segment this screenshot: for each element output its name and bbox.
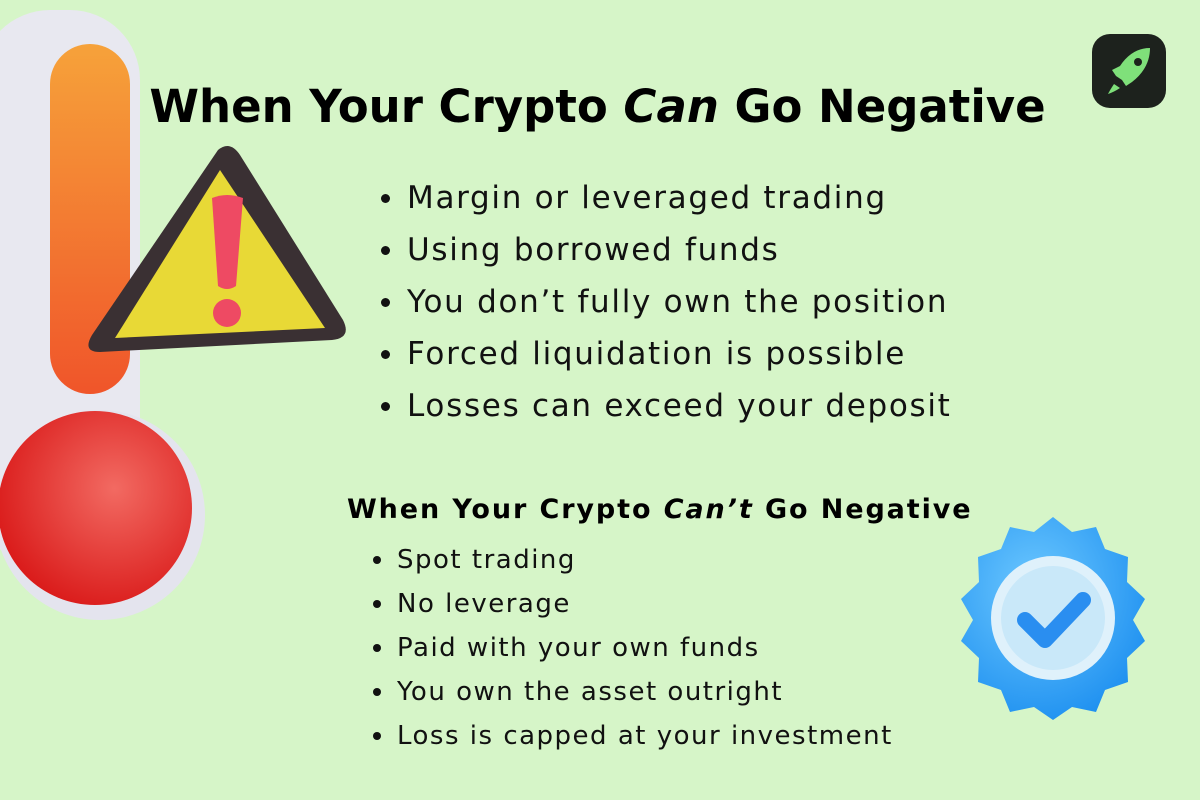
icon: verified badge (961, 517, 1145, 720)
list: can't go negative: No leverage (397, 589, 571, 619)
list: can go negative (381, 180, 952, 424)
list: can go negative: Margin or leveraged trading (407, 180, 887, 216)
subtitle: When Your Crypto Can’t Go Negative (347, 494, 972, 525)
logo: rocket (1092, 34, 1166, 108)
list: can go negative: Losses can exceed your deposit (407, 388, 952, 424)
list: can go negative: You don’t fully own the position (407, 284, 948, 320)
title: When Your Crypto Can Go Negative (149, 80, 1046, 133)
list: can't go negative: Spot trading (397, 545, 576, 575)
icon: warning triangle (88, 146, 346, 352)
list: can't go negative: Loss is capped at your investment (397, 721, 893, 751)
list: can go negative: Forced liquidation is possible (407, 336, 906, 372)
list: can't go negative (373, 545, 893, 751)
list: can't go negative: You own the asset outright (397, 677, 783, 707)
icon: thermometer with warning sign (0, 10, 346, 620)
list: can't go negative: Paid with your own funds (397, 633, 760, 663)
list: can go negative: Using borrowed funds (407, 232, 780, 268)
